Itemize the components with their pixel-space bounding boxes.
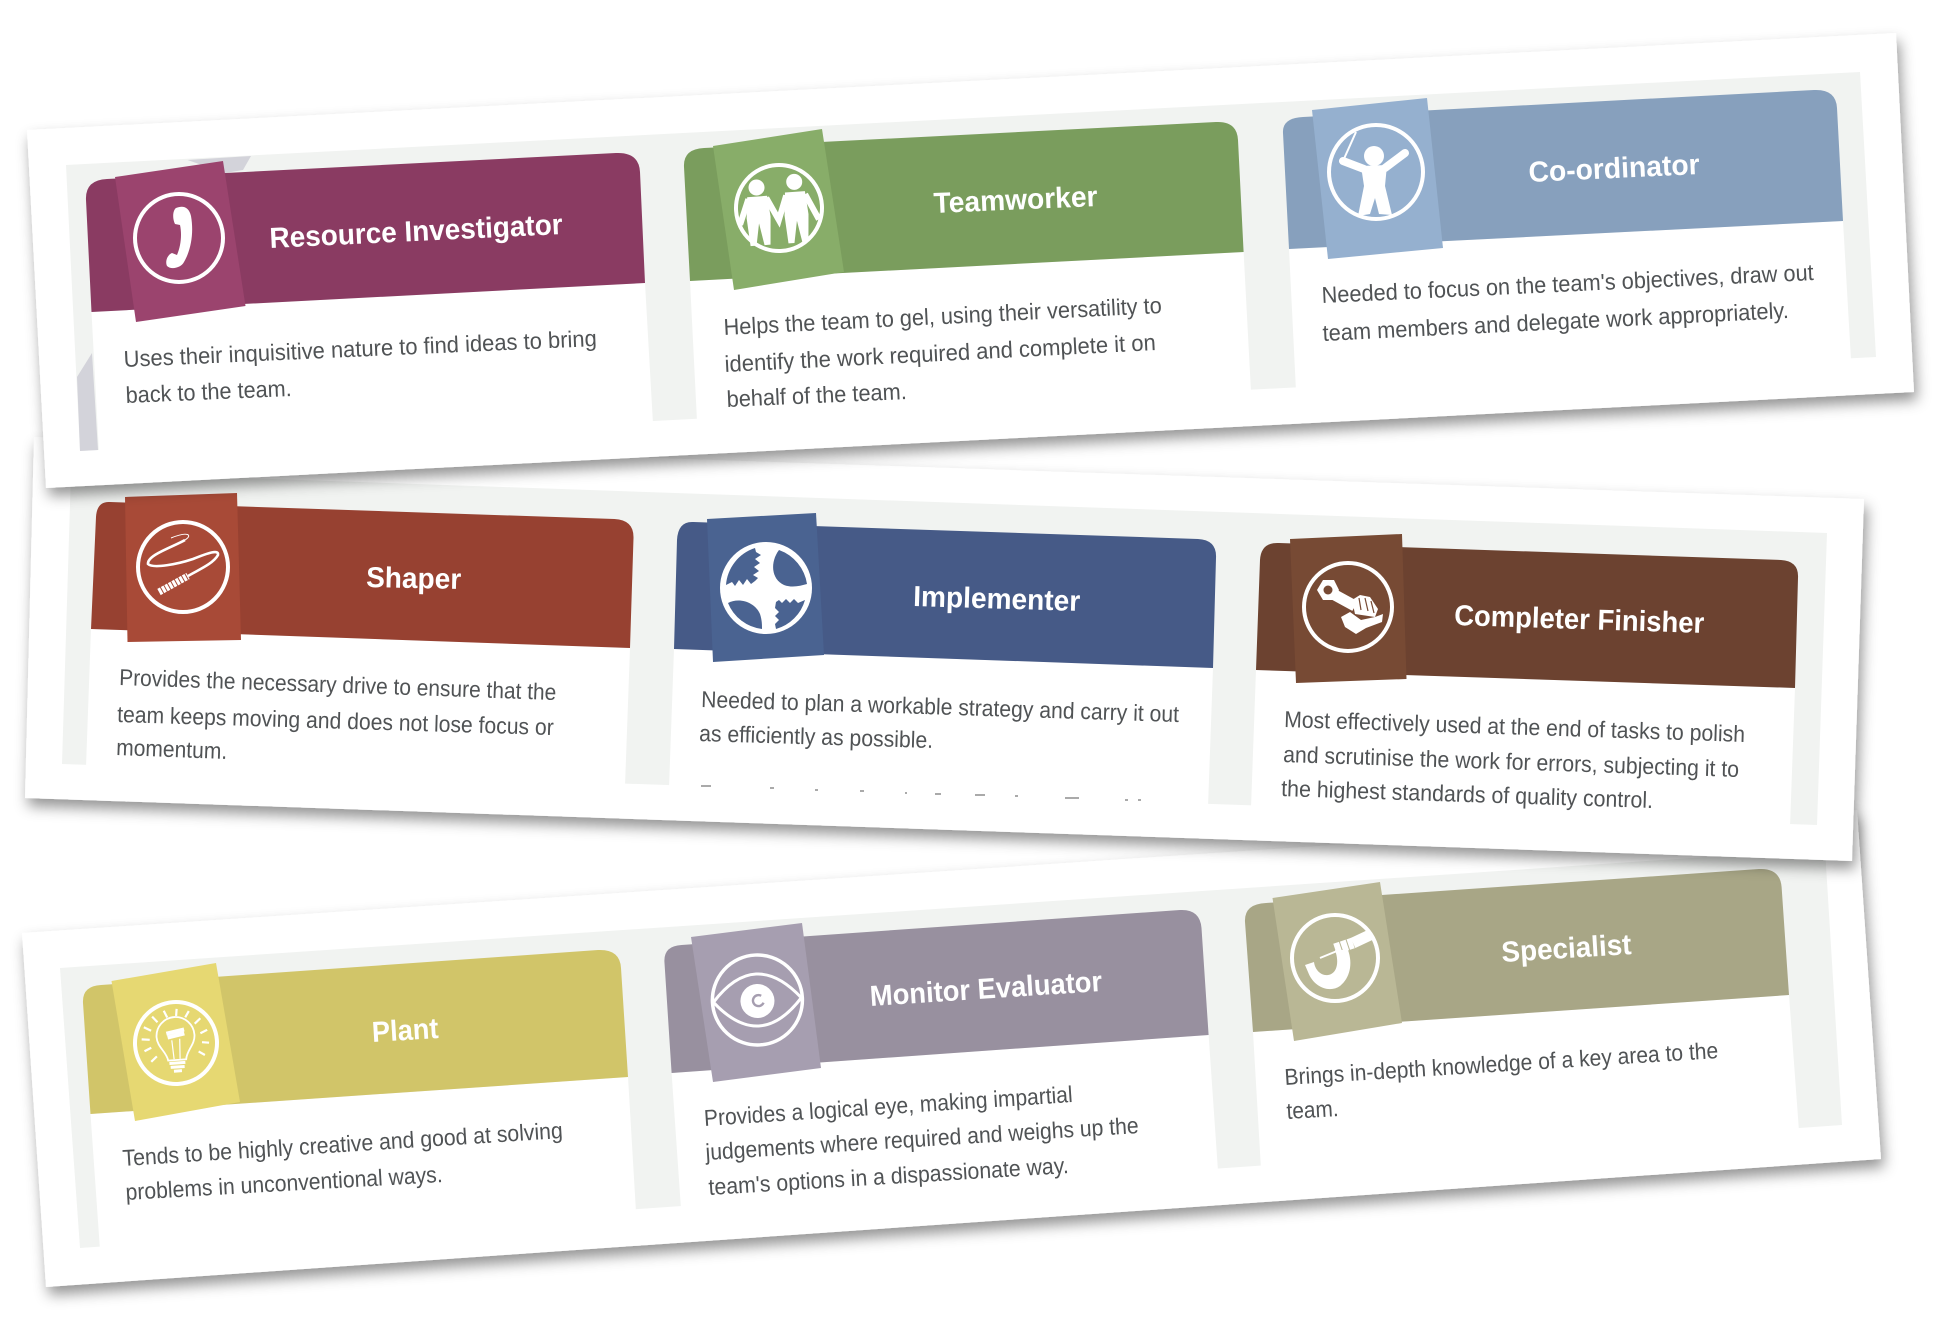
title: Monitor Evaluator: [869, 966, 1103, 1013]
description: [723, 292, 1162, 412]
card: Completer Finisher: [1251, 534, 1798, 827]
grey backing 3: [60, 849, 1842, 1248]
description: [699, 686, 1180, 753]
flag: [691, 923, 821, 1082]
description: Provides a logical eye, making impartial: [703, 1081, 1073, 1131]
flag: [125, 493, 241, 642]
flag: [707, 513, 824, 662]
panel: strip 3: [22, 810, 1881, 1287]
banner: [664, 910, 1209, 1073]
description: [703, 1081, 1139, 1200]
banner: [83, 950, 628, 1114]
description: back to the team.: [125, 375, 292, 408]
description: [122, 1117, 563, 1205]
description: [116, 664, 557, 764]
title: Co-ordinator: [1528, 149, 1700, 189]
icon: two people holding hands: [733, 162, 825, 254]
flag: [1290, 534, 1406, 683]
grey backing 2: [62, 472, 1827, 825]
card: Shaper: [86, 493, 634, 786]
banner: [684, 122, 1244, 281]
card body: [690, 252, 1251, 421]
flag: [713, 129, 844, 290]
icon: micrometer: [1292, 915, 1378, 1001]
icon: gears: [720, 542, 812, 634]
description: identify the work required and complete it on: [724, 329, 1156, 377]
card body: [1253, 995, 1799, 1169]
description: Uses their inquisitive nature to find ideas to bring: [123, 325, 597, 372]
card body: [90, 1077, 636, 1250]
paper sheet 1: [27, 33, 1914, 488]
panel: strip 2: [25, 437, 1864, 861]
grey backing 1: [66, 72, 1876, 451]
description: momentum.: [116, 734, 228, 764]
card body: [86, 629, 630, 786]
title: Resource Investigator: [269, 209, 563, 255]
panel: strip 1: [27, 33, 1914, 488]
card body: [92, 283, 653, 453]
flag: [112, 963, 240, 1121]
description: problems in unconventional ways.: [125, 1161, 443, 1205]
card: Specialist: [1245, 869, 1799, 1169]
icon: conductor: [1329, 125, 1423, 219]
card body: [669, 649, 1213, 807]
description: the highest standards of quality control.: [1281, 775, 1653, 813]
description: [123, 325, 597, 408]
icon: whip: [138, 522, 228, 612]
description: judgements where required and weighs up the: [704, 1112, 1139, 1165]
title: Teamworker: [933, 181, 1098, 220]
title: Plant: [371, 1013, 440, 1049]
paper sheet 2: [25, 437, 1864, 861]
banner: [1283, 90, 1843, 249]
description: [1284, 1037, 1719, 1124]
card: Resource Investigator: [86, 153, 653, 453]
flag: [115, 161, 246, 322]
card: Plant: [83, 950, 636, 1250]
card body: [1251, 670, 1795, 827]
title: Shaper: [366, 562, 462, 596]
card body: [672, 1035, 1218, 1209]
banner: [1245, 869, 1789, 1032]
flag: [1272, 882, 1402, 1041]
flag: [1312, 98, 1443, 259]
description: team's options in a dispassionate way.: [708, 1152, 1069, 1200]
description: Provides the necessary drive to ensure that the: [119, 664, 557, 705]
card body: [1289, 221, 1851, 391]
card: Implementer: [669, 513, 1216, 807]
icon: eye: [710, 953, 805, 1047]
title: Implementer: [913, 581, 1081, 618]
description: [1281, 706, 1745, 813]
description: Most effectively used at the end of tasks to polish: [1284, 706, 1745, 747]
description: team keeps moving and does not lose focus or: [117, 701, 554, 740]
paper sheet 3: [22, 810, 1881, 1287]
card: Teamworker: [684, 122, 1251, 421]
description: [1321, 259, 1815, 346]
description: team members and delegate work appropriately.: [1322, 297, 1789, 346]
icon: light bulb: [132, 999, 220, 1087]
icon: telephone: [135, 194, 223, 282]
description: as efficiently as possible.: [699, 720, 934, 753]
description: Brings in-depth knowledge of a key area to the: [1284, 1037, 1719, 1090]
card: Monitor Evaluator: [664, 910, 1218, 1209]
title: Completer Finisher: [1454, 600, 1705, 640]
description: team.: [1286, 1095, 1339, 1124]
description: Helps the team to gel, using their versatility to: [723, 292, 1162, 340]
banner: [1256, 543, 1798, 688]
description: and scrutinise the work for errors, subjecting it to: [1283, 741, 1739, 782]
title: Specialist: [1500, 929, 1633, 969]
banner: [674, 522, 1216, 668]
banner: [86, 153, 645, 312]
icon: wrench in hand: [1304, 563, 1392, 651]
description: Needed to focus on the team's objectives, draw out: [1321, 259, 1815, 308]
banner: [91, 502, 634, 648]
description: behalf of the team.: [726, 378, 907, 412]
description: Tends to be highly creative and good at solving: [122, 1117, 563, 1171]
card: Co-ordinator: [1283, 90, 1851, 391]
description: Needed to plan a workable strategy and carry it out: [701, 686, 1180, 727]
